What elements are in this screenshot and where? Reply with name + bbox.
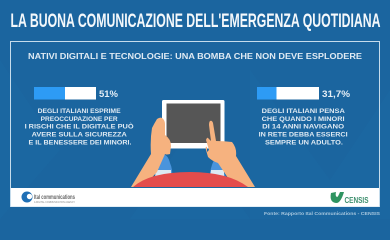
source note: Fonte: Rapporto Ital Communications - CENSIS: [264, 211, 380, 216]
description 31,7%: CHE QUANDO I MINORI: [262, 116, 345, 123]
description 31,7%: IN RETE DEBBA ESSERCI: [259, 132, 348, 139]
main panel: [10, 42, 380, 206]
description 31,7%: SEMPRE UN ADULTO.: [265, 140, 343, 147]
icon: left shoe: [155, 154, 172, 177]
icon: red shirt: [133, 172, 248, 187]
icon: tablet: [162, 100, 224, 148]
logo wordmark: CENSIS: [344, 195, 369, 205]
illustration: person holding tablet: [131, 100, 255, 187]
description 51%: PREOCCUPAZIONE PER: [41, 116, 118, 123]
progress bar 51%: [34, 87, 96, 100]
logo mark: [331, 192, 344, 203]
description 51%: I RISCHI CHE IL DIGITALE PUÒ: [25, 122, 134, 131]
logo tagline: A DIGITAL COMMUNICATION AGENCY: [34, 201, 75, 204]
description 31,7%: DI 14 ANNI NAVIGANO: [262, 124, 344, 131]
icon: right shoe: [210, 160, 226, 177]
logo wordmark: Ital communications: [34, 195, 75, 201]
description 51%: DEGLI ITALIANI ESPRIME: [38, 108, 121, 115]
logo mark: [22, 192, 32, 202]
value 51%: 51%: [99, 89, 119, 99]
icon: left arm and hand: [131, 118, 171, 187]
stat: 31,7%: [257, 87, 351, 147]
logo: Ital Communications: [22, 192, 75, 204]
progress bar 31,7%: [257, 87, 319, 100]
stat: 51%: [25, 87, 135, 147]
value 31,7%: 31,7%: [322, 89, 351, 99]
description 31,7%: DEGLI ITALIANI PENSA: [262, 108, 345, 115]
logo: Censis: [331, 192, 369, 205]
icon: right arm and hand: [206, 121, 255, 187]
description 51%: AVERE SULLA SICUREZZA: [32, 132, 127, 139]
description 51%: E IL BENESSERE DEI MINORI.: [28, 140, 132, 147]
panel heading: NATIVI DIGITALI E TECNOLOGIE: UNA BOMBA CHE NON DEVE ESPLODERE: [28, 52, 362, 61]
